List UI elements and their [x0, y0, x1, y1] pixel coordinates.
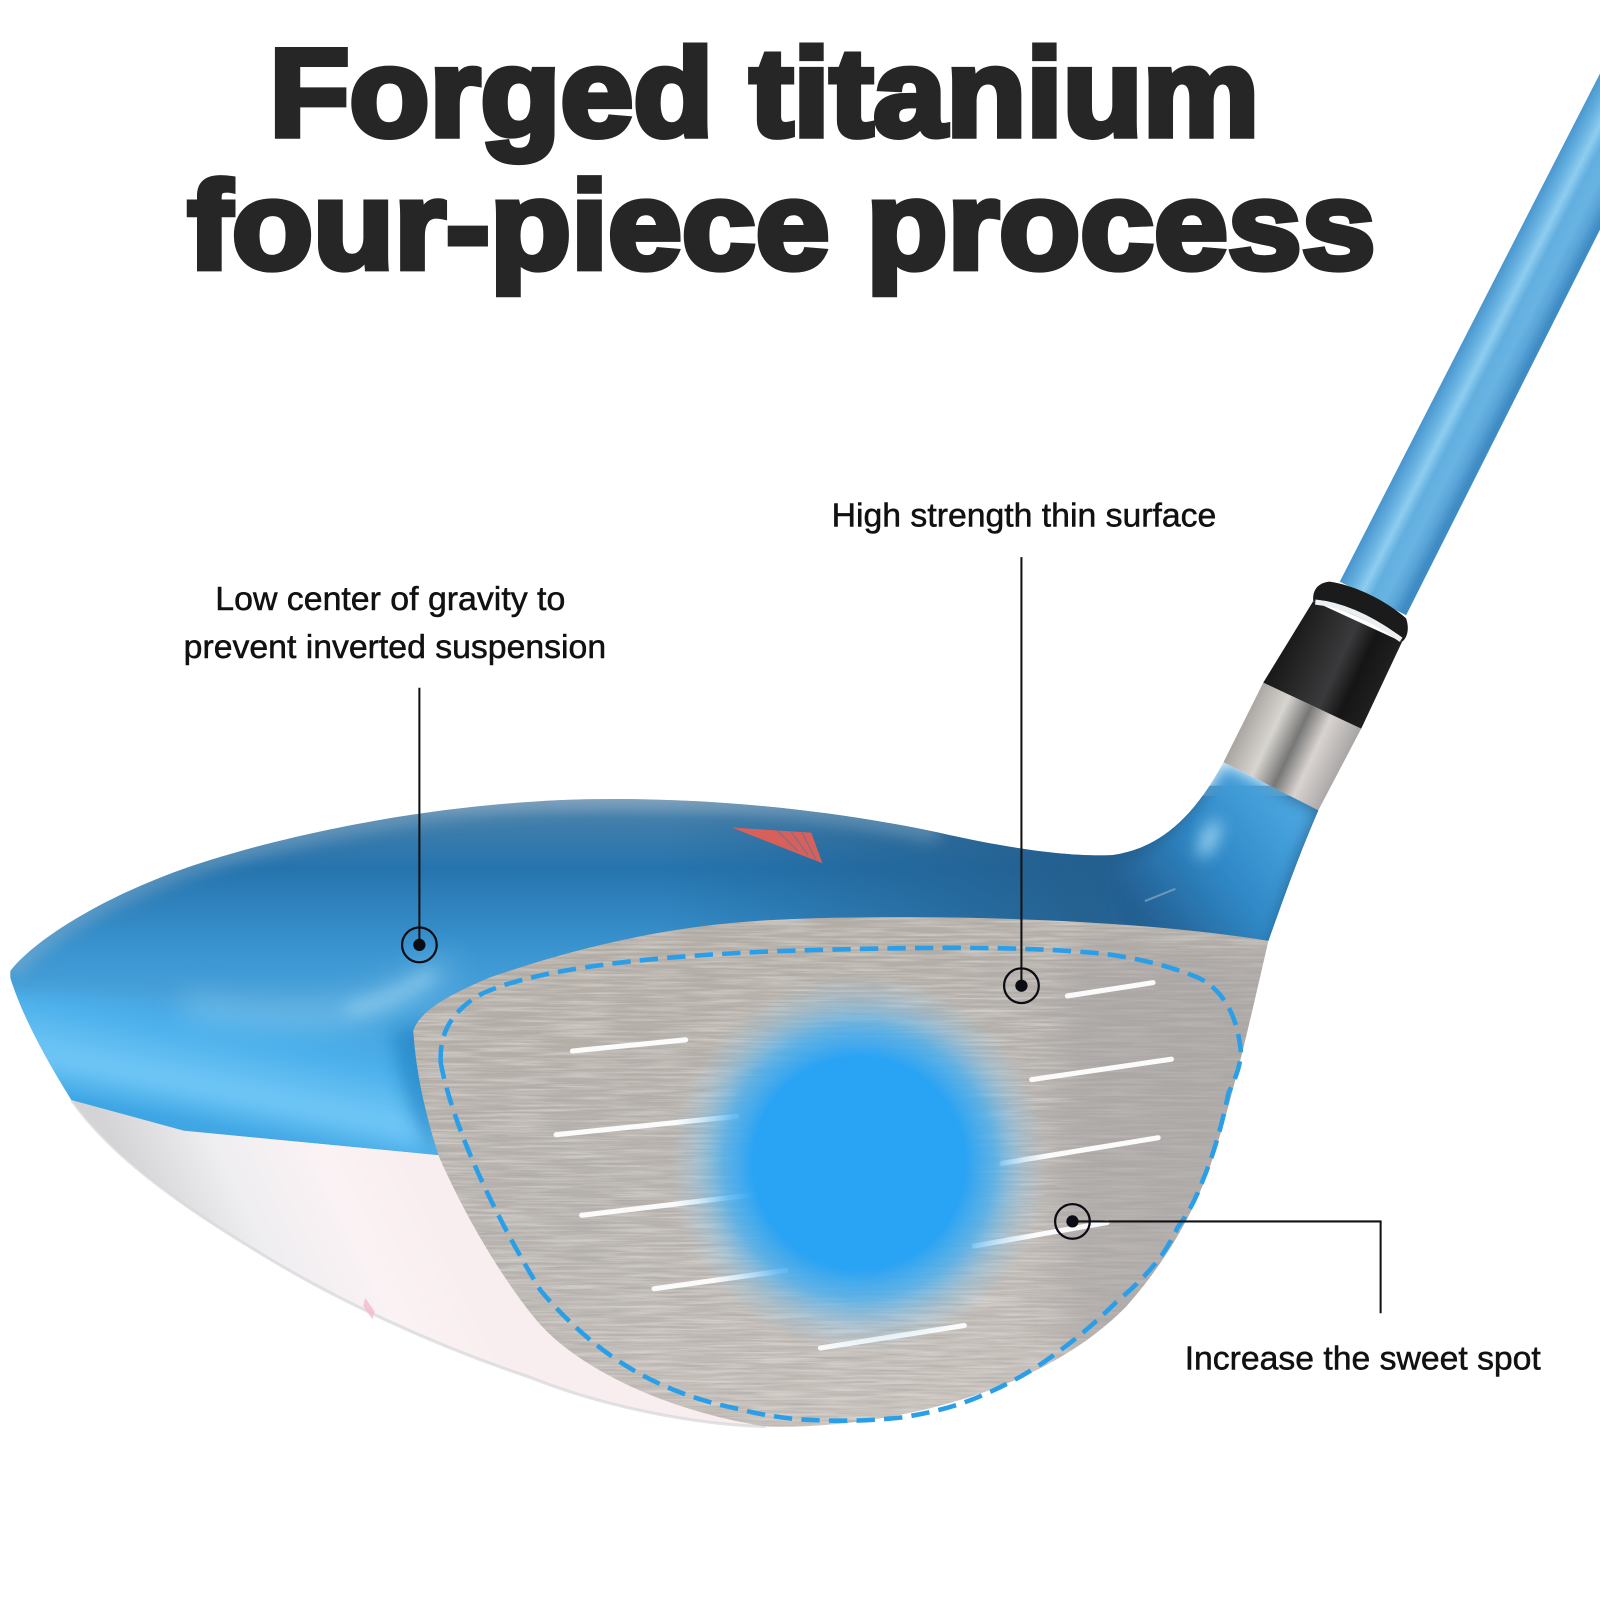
shaft [1340, 73, 1600, 615]
leader line [1020, 557, 1022, 986]
sole of club head [71, 1100, 765, 1427]
leader line [1072, 1221, 1381, 1313]
callout: sweet spot [1055, 1204, 1541, 1377]
callout: thin surface [832, 498, 1216, 1003]
club head body [0, 762, 1327, 1173]
marker [1055, 1204, 1090, 1239]
black ferrule [1263, 601, 1402, 729]
title line 2: four-piece process [188, 156, 1376, 295]
title [188, 24, 1376, 295]
silver ferrule [1223, 683, 1361, 810]
pink mark [363, 1298, 374, 1319]
dashed sweet zone outline [441, 948, 1241, 1421]
label text: Low center of gravity to [215, 581, 565, 618]
title line 1: Forged titanium [269, 24, 1259, 163]
red crown mark [732, 828, 822, 863]
score lines [556, 983, 1171, 1348]
marker [1004, 968, 1039, 1003]
hosel logo mark [1145, 889, 1176, 901]
sweet spot glow [670, 974, 1048, 1352]
label text: High strength thin surface [832, 498, 1216, 535]
marker [402, 928, 437, 962]
leader line [418, 688, 420, 945]
club face [408, 908, 1286, 1439]
callout: low center of gravity [184, 581, 606, 962]
label text line 2: prevent inverted suspension [184, 629, 606, 666]
label text: Increase the sweet spot [1185, 1340, 1541, 1377]
ferrule ring [1313, 582, 1408, 642]
